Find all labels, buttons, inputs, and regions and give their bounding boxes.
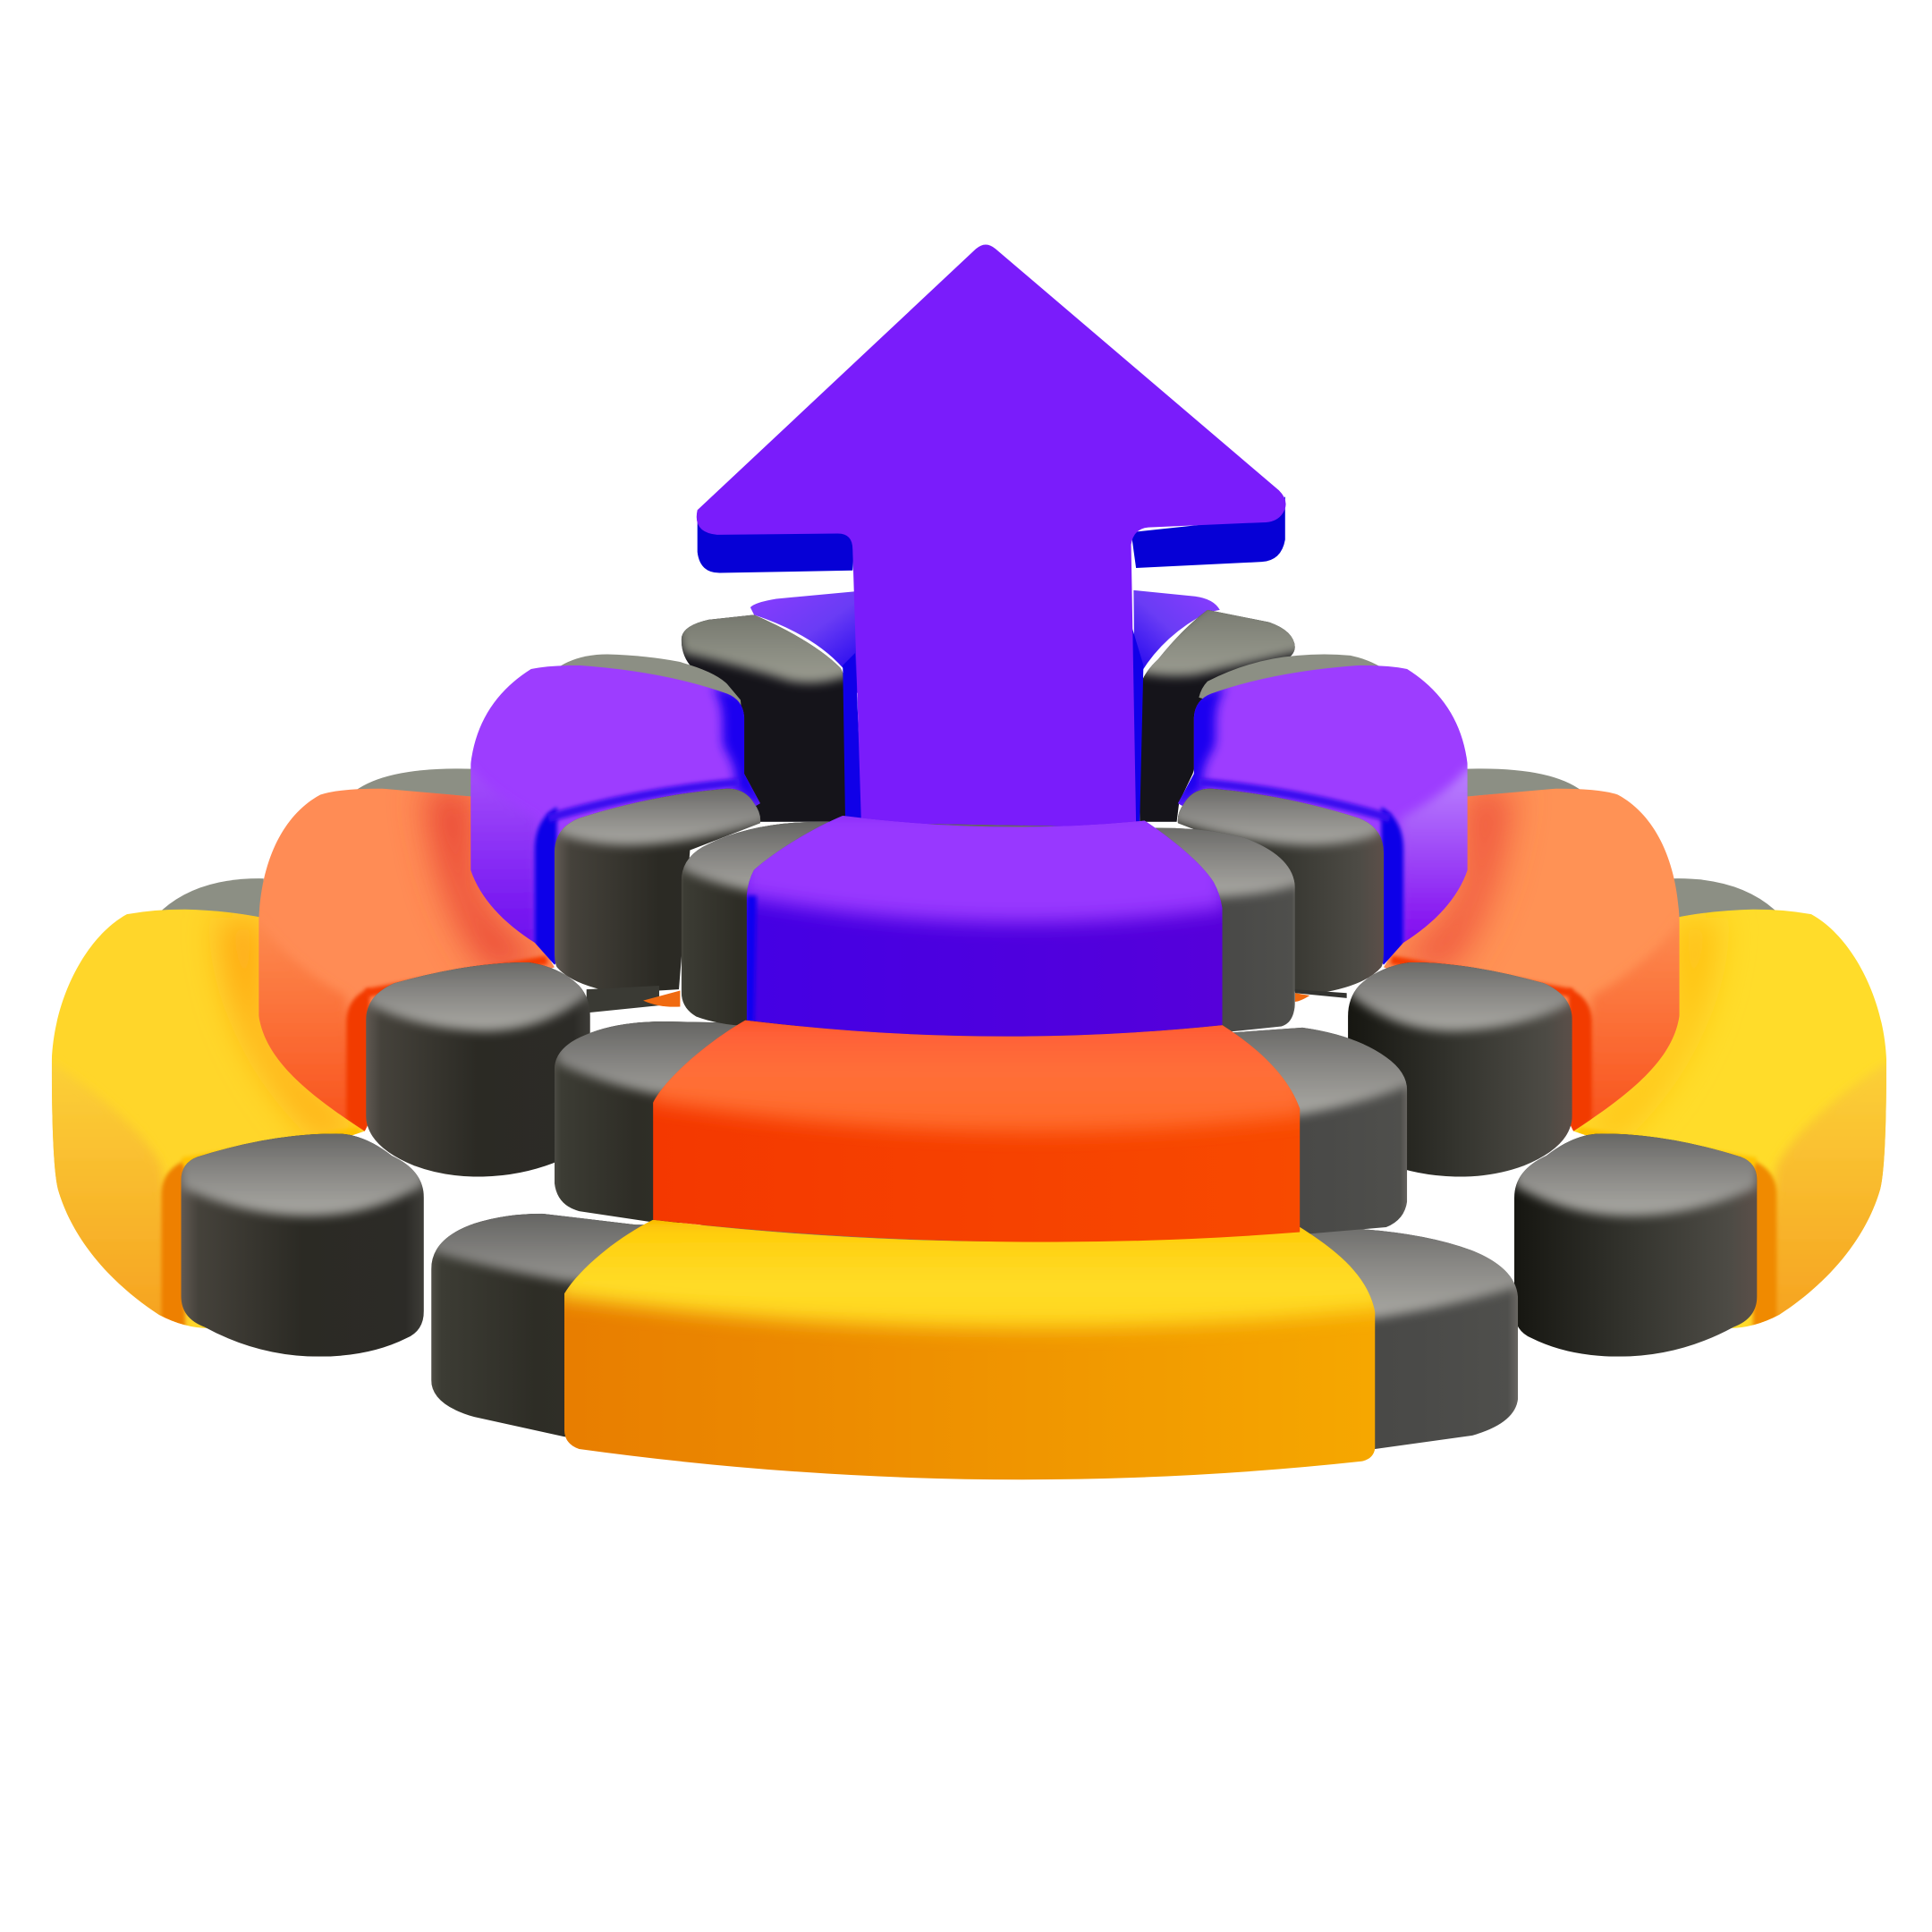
right purple-arc dark block (1177, 789, 1384, 992)
left yellow-arc dark block (181, 1133, 424, 1357)
left purple-arc dark block (555, 789, 760, 991)
illustration: tiered 3D arcs with arrow (52, 245, 1886, 1479)
arrow top face (697, 244, 1286, 830)
right yellow arc (1573, 909, 1886, 1328)
back purple arc segments (750, 590, 1220, 702)
left orange-arc dark block (366, 962, 590, 1177)
right purple arc (1178, 665, 1468, 964)
right yellow-arc dark block (1514, 1133, 1757, 1357)
top tier dark band (682, 822, 1295, 1032)
right orange arc (1384, 789, 1680, 1131)
left purple arc (470, 665, 760, 964)
blue slivers beside arrow stem (843, 629, 1143, 822)
back left dark block (682, 614, 845, 822)
grey tips behind arcs (160, 654, 1776, 924)
back right dark block (1140, 610, 1295, 822)
left orange arc (258, 789, 555, 1131)
middle tier orange band (647, 1016, 1306, 1257)
connector strips and orange tips behind centre (587, 986, 1347, 1013)
arrow (697, 244, 1286, 830)
arrow side faces (698, 496, 1285, 573)
bottom tier dark band (431, 1213, 1519, 1449)
right orange-arc dark block (1348, 962, 1572, 1177)
top tier purple band (746, 816, 1222, 1037)
bottom tier yellow band (555, 1214, 1386, 1491)
left yellow arc (52, 909, 365, 1328)
middle tier dark band (542, 1011, 1417, 1238)
